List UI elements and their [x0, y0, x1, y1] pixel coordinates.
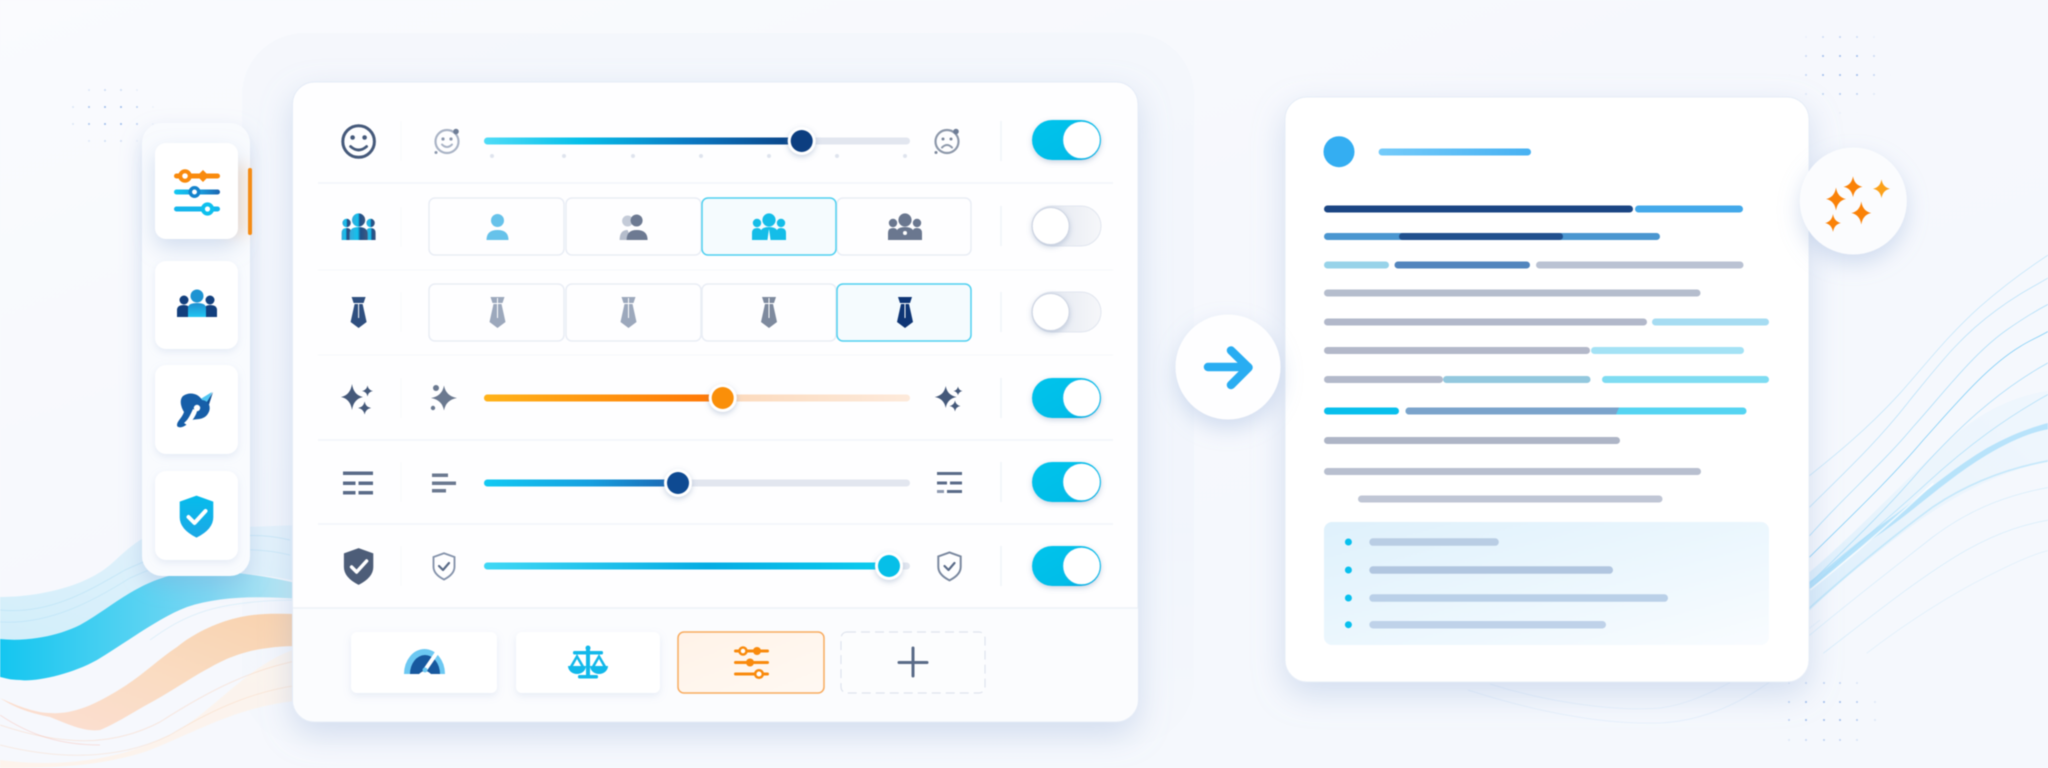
- icon: sparkles: [341, 384, 373, 414]
- wave: cyan: [0, 572, 300, 680]
- row: safety slider: [344, 546, 1101, 586]
- icon: sparkles right: [935, 386, 962, 412]
- slider: structure: [484, 469, 910, 497]
- faint arcs under document: [1468, 620, 1820, 723]
- row: creativity slider: [341, 378, 1101, 418]
- panel: settings controls: [292, 82, 1138, 722]
- wave strands: [1800, 252, 2048, 653]
- icon: shield outline right: [938, 552, 961, 580]
- preset: add new: [841, 632, 985, 693]
- wave: pale orange: [0, 646, 305, 768]
- line 9: [1324, 437, 1620, 444]
- line 5: [1324, 318, 1769, 326]
- active tab indicator: [222, 165, 252, 235]
- toggle: off: [1032, 292, 1101, 332]
- arrow: [1208, 350, 1248, 385]
- document text lines: [1324, 206, 1769, 502]
- line 6: [1324, 347, 1744, 354]
- toggle: on: [1032, 546, 1101, 586]
- icon: smiley: [343, 126, 374, 157]
- wave: sky blue: [0, 525, 300, 640]
- line 3: [1324, 262, 1744, 268]
- row: formality level: [351, 284, 1101, 341]
- icon: shield outline small: [434, 553, 454, 580]
- icon: team: [177, 290, 217, 317]
- rail card: sliders (active): [155, 143, 238, 239]
- line 11: [1358, 496, 1662, 502]
- toggle: on: [1032, 120, 1101, 160]
- icon: tie option 1: [490, 297, 506, 328]
- line 4: [1324, 290, 1700, 296]
- toggle: on: [1032, 462, 1101, 502]
- halo panel behind settings: [242, 33, 1194, 745]
- wave band: light blue: [1800, 390, 2048, 620]
- preset: speed gauge: [351, 632, 497, 693]
- bullet item 1: [1345, 538, 1499, 546]
- wave strands: [0, 535, 300, 755]
- row dividers: [293, 121, 1138, 608]
- icon: shield check: [180, 496, 213, 538]
- bullet item 2: [1345, 566, 1613, 574]
- panel: generated document: [1285, 97, 1809, 682]
- icon: small smiley: [434, 129, 459, 154]
- icon: group grey: [888, 213, 922, 240]
- rail card: shield: [155, 471, 238, 560]
- line 10: [1324, 468, 1701, 475]
- toggle: off: [1032, 206, 1101, 246]
- dot grid top left: [72, 88, 154, 142]
- icon: structure: [343, 472, 373, 494]
- icon: tie option 3: [761, 297, 777, 328]
- dot grid top right: [1804, 36, 1876, 96]
- icon: structure right: [937, 472, 962, 493]
- icon: two people: [620, 214, 648, 240]
- slider: safety: [484, 552, 910, 580]
- row: structure slider: [343, 462, 1101, 502]
- slider: creativity: [484, 384, 910, 412]
- icon: shield dark: [344, 548, 373, 585]
- preset bar: [351, 632, 985, 693]
- wave ribbon: bright blue: [1800, 422, 2048, 595]
- rail card: pen tool: [155, 365, 238, 454]
- bullet item 3: [1345, 594, 1668, 602]
- document header: [1324, 136, 1531, 167]
- line 7: [1324, 376, 1769, 383]
- icon: tie: [351, 297, 367, 328]
- row: audience level: [342, 198, 1101, 255]
- icon: pen: [177, 392, 213, 427]
- line 1: [1324, 206, 1743, 212]
- icon: small lines: [432, 474, 456, 492]
- slider: tone: [484, 127, 910, 158]
- icon: group highlighted: [752, 213, 786, 240]
- icon: tie selected: [897, 297, 913, 328]
- line 8: [1324, 408, 1746, 414]
- badge: orange sparkles: [1800, 148, 1907, 254]
- right flowing waves: [1800, 252, 2048, 653]
- icon: audience: [342, 213, 376, 240]
- rail card: team: [155, 261, 238, 349]
- left flowing waves: [0, 525, 305, 768]
- line 2: [1324, 233, 1660, 240]
- arrow button: [1176, 314, 1280, 420]
- icon: small sparkle: [431, 385, 457, 410]
- toggle: on: [1032, 378, 1101, 418]
- wave: orange: [0, 614, 300, 730]
- preset: sliders selected: [678, 632, 824, 693]
- panel: left navigation rail: [142, 123, 252, 576]
- icon: tie option 2: [620, 297, 636, 328]
- dot grid bottom right: [1789, 683, 1875, 740]
- callout: bullet list box: [1324, 522, 1769, 645]
- segmented control: audience: [429, 198, 971, 255]
- preset: balance scales: [516, 632, 660, 693]
- bullet item 4: [1345, 621, 1606, 628]
- icon: one person: [486, 214, 508, 240]
- icon: sad face: [934, 129, 959, 154]
- segmented control: formality: [429, 284, 971, 341]
- row: tone slider: [343, 120, 1101, 160]
